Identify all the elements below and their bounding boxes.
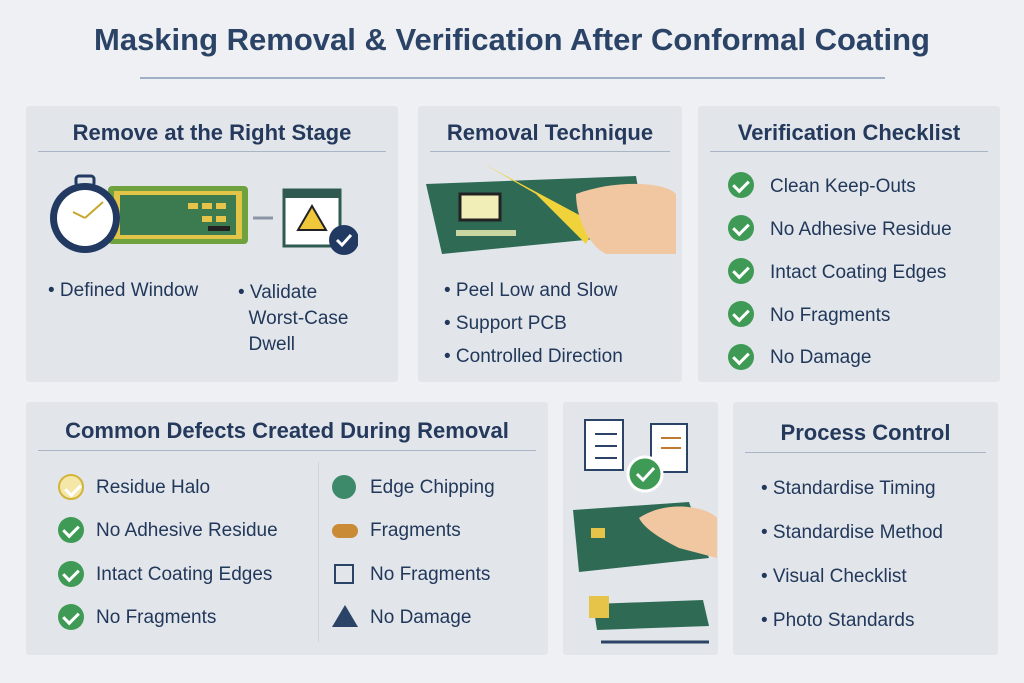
checklist items: Intact Coating Edges bbox=[770, 262, 946, 283]
list: technique: • Support PCB bbox=[444, 313, 567, 334]
icon: stopwatch and pcb bbox=[50, 174, 358, 255]
checklist items: No Damage bbox=[770, 347, 871, 368]
list: technique: • Peel Low and Slow bbox=[444, 280, 618, 301]
left list: No Fragments bbox=[96, 607, 216, 628]
heading: removal technique: Removal Technique bbox=[447, 120, 653, 145]
panel: verification checklist bbox=[698, 106, 1000, 382]
text: validate worst-case dwell: Dwell bbox=[249, 334, 295, 355]
text: validate worst-case dwell bbox=[238, 282, 349, 355]
left list: Intact Coating Edges bbox=[96, 564, 272, 585]
illustration: pcb with tape bbox=[589, 596, 709, 644]
right list: Edge Chipping bbox=[370, 477, 495, 498]
illustration: peeling tape from pcb bbox=[426, 164, 676, 254]
checklist items: No Fragments bbox=[770, 305, 890, 326]
list: process control bbox=[761, 478, 943, 631]
right list: Fragments bbox=[370, 520, 461, 541]
icon: clipboards with check bbox=[584, 419, 688, 492]
list: process control: • Standardise Method bbox=[761, 522, 943, 543]
checklist items: No Adhesive Residue bbox=[770, 219, 952, 240]
heading: process control: Process Control bbox=[781, 420, 950, 445]
right list: No Fragments bbox=[370, 564, 490, 585]
text: validate worst-case dwell: Worst-Case bbox=[249, 308, 349, 329]
list: process control: • Standardise Timing bbox=[761, 478, 936, 499]
heading: common defects: Common Defects Created During Removal bbox=[65, 418, 509, 443]
checklist items bbox=[728, 172, 952, 370]
panel: common defects bbox=[26, 402, 548, 655]
panel: process control bbox=[733, 402, 998, 655]
text: validate worst-case dwell: • Validate bbox=[238, 282, 317, 303]
panel: illustrations bbox=[563, 402, 718, 655]
list: process control: • Photo Standards bbox=[761, 610, 914, 631]
panel: removal technique bbox=[418, 106, 682, 382]
list: process control: • Visual Checklist bbox=[761, 566, 907, 587]
heading: remove at the right stage: Remove at the Right Stage bbox=[73, 120, 351, 145]
panel: remove at the right stage bbox=[26, 106, 398, 382]
text: defined window: • Defined Window bbox=[48, 280, 198, 301]
left list bbox=[58, 474, 278, 630]
title: Masking Removal & Verification After Conformal Coating bbox=[94, 22, 930, 57]
right list bbox=[332, 475, 495, 628]
checklist items: Clean Keep-Outs bbox=[770, 176, 916, 197]
right list: No Damage bbox=[370, 607, 471, 628]
list: technique bbox=[444, 280, 623, 367]
list: technique: • Controlled Direction bbox=[444, 346, 623, 367]
heading: verification checklist: Verification Checklist bbox=[738, 120, 960, 145]
left list: Residue Halo bbox=[96, 477, 210, 498]
left list: No Adhesive Residue bbox=[96, 520, 278, 541]
illustration: pcb with hand bbox=[573, 502, 717, 572]
